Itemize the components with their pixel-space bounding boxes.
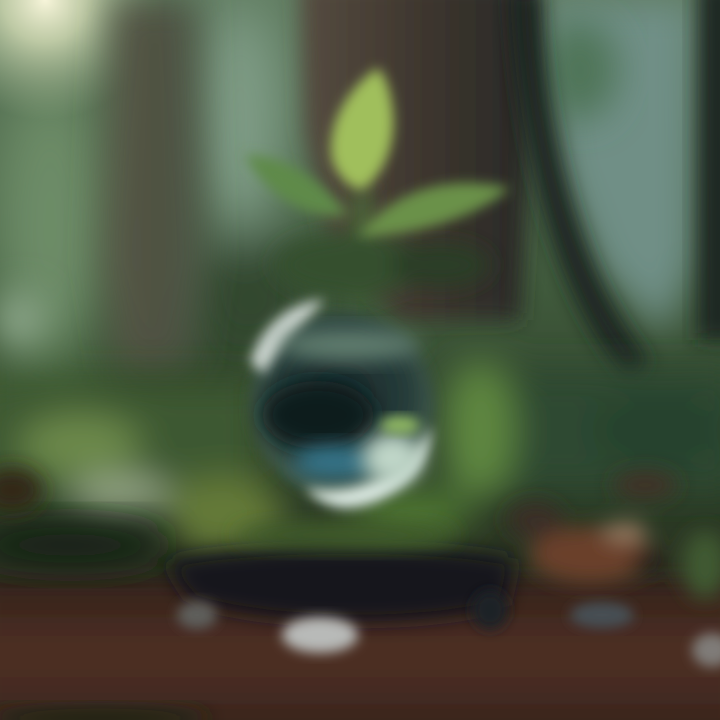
- globe blue tint: [293, 446, 377, 478]
- foliage: upper right: [542, 20, 618, 120]
- globe bright crescent: [305, 425, 432, 508]
- background foliage: [0, 0, 320, 470]
- globe green reflection: [380, 416, 420, 434]
- stones: [177, 590, 720, 667]
- panel: pale right background: [545, 0, 695, 335]
- glass globe: [250, 300, 434, 508]
- stone: left: [177, 601, 217, 629]
- stone: far right: [692, 633, 720, 667]
- plant stem and shadow foliage: [275, 190, 490, 300]
- dark ledge far left: [0, 468, 42, 512]
- leaf: left: [245, 155, 348, 216]
- leaf litter right: [507, 471, 720, 599]
- stone: centre: [282, 617, 358, 653]
- globe dark centre: [262, 381, 374, 449]
- ground soil: [0, 578, 720, 720]
- tree trunk: right edge: [698, 0, 720, 340]
- tree trunk: left: [102, 0, 205, 370]
- dark soil bottom-left: [0, 708, 210, 720]
- dark foliage base left: [0, 521, 170, 569]
- stone: right: [570, 602, 634, 628]
- tree trunk: centre: [300, 0, 535, 320]
- stone: dish side: [472, 590, 508, 630]
- tree root: dark curve: [525, 0, 640, 372]
- globe top band: [280, 329, 420, 361]
- globe body: [250, 313, 434, 497]
- leaf: top: [331, 68, 393, 190]
- globe top reflection: [250, 300, 325, 374]
- undergrowth band: [0, 292, 720, 553]
- globe lower-right glow: [362, 432, 422, 484]
- leaf: right: [358, 183, 510, 236]
- sunlight glow: [0, 0, 165, 120]
- dark dish under globe: [165, 547, 515, 621]
- plant leaves: [245, 68, 510, 236]
- moss on dish: [235, 521, 455, 549]
